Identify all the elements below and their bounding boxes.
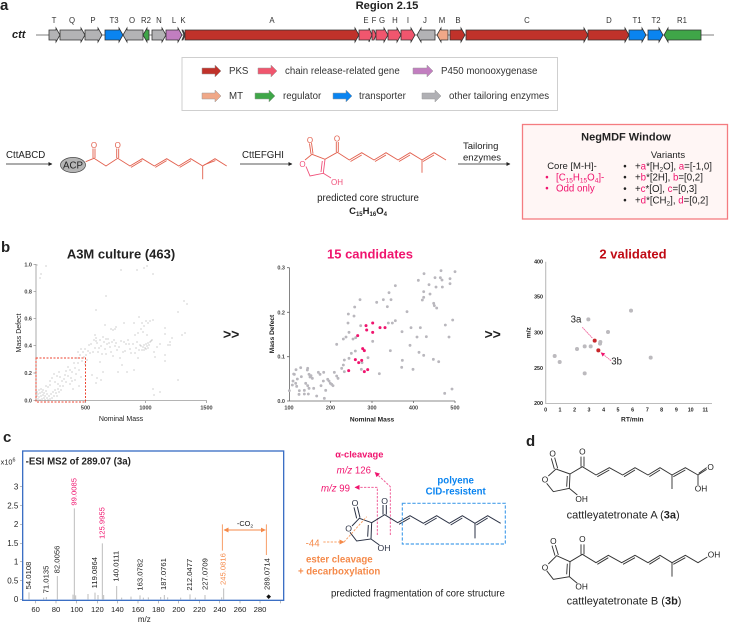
panel label d: d (526, 433, 535, 450)
CO2 loss bracket (222, 519, 266, 555)
scatter chart: 15 candidates: 400 (409, 406, 418, 412)
scatter chart: 15 candidates: 0.0 (277, 399, 285, 405)
peak labels: 212.0477 (185, 559, 194, 591)
spectrum title: -ESI MS2 of 289.07 (3a) (26, 457, 131, 468)
gene name labels: N (156, 16, 162, 25)
legend panel: chain release-related gene (285, 66, 400, 77)
caption: cattleyatetronate A: cattleyatetronate A (3a) (567, 509, 680, 521)
peak labels: 187.0761 (159, 558, 168, 590)
panel: NegMDF Window: 2 (667, 200, 671, 208)
core structure skeleton: O (345, 524, 352, 534)
peak labels: 245.0816 (219, 553, 228, 585)
fragmentation scheme (298, 449, 505, 599)
structure: cattleyatetronate A: O (542, 474, 549, 484)
scatter chart: 2 validated: 200 (534, 401, 543, 407)
y axis scale label: x10 (1, 457, 12, 466)
gene name labels: A (269, 16, 275, 25)
scatter chart: 2 validated: 11 (703, 407, 708, 413)
caption: predicted core structure: O (376, 206, 384, 217)
core structure skeleton (345, 496, 501, 553)
scatter chart: 2 validated: 5 (617, 407, 620, 413)
label: -44: -44 (306, 538, 320, 549)
panel: NegMDF Window: • (623, 162, 627, 172)
panel: NegMDF Window: Variants (651, 150, 685, 161)
legend panel: regulator (283, 91, 322, 102)
x tick labels: 140 (111, 605, 124, 614)
scatter chart: 2 validated: 10 (688, 407, 694, 413)
x tick labels: 240 (213, 605, 226, 614)
scatter chart: A3M culture: Mass Defect (16, 313, 23, 352)
precursor marker (266, 594, 271, 599)
structure: cattleyatetronate A: OH (695, 484, 707, 494)
gene name labels: C (524, 16, 530, 25)
structure: ACP-bound polyketide: O (115, 141, 121, 150)
gene name labels: K (180, 16, 186, 25)
legend panel (182, 58, 558, 110)
panel: NegMDF Window: NegMDF Window (581, 132, 671, 144)
caption: predicted core structure: 15 (356, 212, 363, 218)
y tick labels: 1 (14, 557, 19, 566)
structure: cattleyatetronate B: OH (575, 581, 588, 591)
panel: NegMDF Window: O (587, 172, 595, 184)
x tick labels (31, 605, 266, 614)
x tick labels: 100 (70, 605, 83, 614)
label: decarboxylation: + decarboxylation (298, 566, 380, 577)
x tick labels: 60 (31, 605, 40, 614)
scatter chart: A3M culture: 500 (81, 406, 90, 412)
structure: ACP-bound polyketide: O (91, 141, 97, 150)
label: polyene: polyene (437, 475, 475, 486)
gene name labels: T2 (651, 16, 661, 25)
peak labels: 119.0864 (90, 556, 99, 588)
spectrum frame (23, 451, 284, 600)
structure: predicted core: O (334, 134, 340, 144)
scatter chart: 15 candidates: 0.1 (277, 355, 285, 361)
gene name labels: Q (69, 16, 75, 25)
arrow: tailoring enzymes (458, 141, 510, 164)
gene name labels: D (606, 16, 612, 25)
orange loss arrow (323, 517, 367, 542)
panel: NegMDF Window: • (623, 196, 627, 206)
scatter chart: A3M culture: Nominal Mass (99, 416, 144, 423)
scatter chart: A3M culture: 0.6 (24, 317, 32, 323)
scatter chart: 2 validated: 250 (534, 366, 543, 372)
panel: NegMDF Window: +c*[O], c=[0,3] (635, 184, 697, 195)
panel: NegMDF Window: +b*[2H], b=[0,2] (635, 172, 703, 184)
caption: predicted core structure: predicted core structure (317, 193, 419, 204)
gene name labels: F (372, 16, 377, 25)
panel: NegMDF Window: 15 (566, 178, 573, 184)
structure: ACP-bound polyketide: ACP (63, 160, 83, 172)
panel: NegMDF Window: 15 (580, 178, 588, 184)
structure: cattleyatetronate B: OH (708, 549, 720, 559)
panel: NegMDF Window: 2 (660, 166, 664, 174)
label: m/z 99: m/z 99 (321, 484, 350, 495)
legend panel: PKS (229, 66, 249, 77)
panel: NegMDF Window: • (623, 172, 627, 184)
heading: A3M culture: A3M culture (463) (67, 246, 175, 262)
arrow: >> second: >> (484, 326, 501, 342)
arrow: CttEFGHI: CttEFGHI (242, 150, 284, 161)
scatter chart: 2 validated: 1 (559, 407, 562, 413)
CO2 loss bracket: -CO (237, 519, 250, 528)
y axis scale label: 6 (12, 458, 15, 464)
peak labels: 125.9955 (97, 507, 106, 539)
arrow: CttABCD (6, 150, 52, 164)
y tick labels: 0.5 (7, 576, 19, 585)
heading: Region 2.15: Region 2.15 (356, 0, 418, 12)
y tick labels (7, 482, 19, 604)
label: ester cleavage: ester cleavage (306, 555, 373, 566)
scatter chart: A3M culture: 1.0 (24, 262, 32, 268)
arrow: >> first: >> (223, 326, 239, 342)
y tick labels: 1.5 (7, 539, 19, 548)
CO2 loss bracket: 2 (250, 524, 253, 530)
arrow: CttABCD: CttABCD (6, 150, 45, 161)
y tick labels: 0 (14, 595, 19, 604)
scatter chart: 2 validated: 4 (602, 407, 605, 413)
arrow: tailoring enzymes: Tailoring (463, 141, 498, 152)
x tick labels: 220 (193, 605, 206, 614)
y tick labels: 3 (14, 482, 19, 491)
box: polyene region (402, 503, 505, 544)
structure: predicted core: OH (331, 178, 343, 187)
structure: cattleyatetronate A: OH (575, 494, 588, 504)
scatter chart: 15 candidates: 500 (450, 406, 460, 412)
x tick labels: 280 (254, 605, 266, 614)
scatter chart: 2 validated: 350 (534, 295, 543, 301)
caption: predicted fragmentation: predicted fragmentation of core structure (331, 588, 505, 599)
peak labels: 140.0111 (112, 551, 121, 582)
scatter chart: A3M culture: 0.2 (24, 371, 32, 377)
gene name labels: M (439, 16, 445, 25)
gene name labels: P (90, 16, 96, 25)
peak labels: 227.0709 (201, 558, 210, 590)
arrow: CttEFGHI (240, 150, 292, 164)
peak labels: 82.0056 (53, 546, 62, 573)
peak labels: 54.0108 (24, 562, 33, 589)
scatter chart: 15 candidates: Nominal Mass (350, 416, 394, 424)
scatter chart: 15 candidates: Mass Defect (269, 314, 276, 353)
structure: cattleyatetronate A: O (579, 447, 586, 457)
scatter chart: A3M culture: 0.4 (24, 344, 33, 350)
structure: cattleyatetronate B (542, 534, 720, 591)
panel: NegMDF Window: a=[-1,0] (679, 162, 712, 172)
gene name labels: E (363, 16, 369, 25)
scatter chart: 2 validated: 3a (571, 314, 582, 325)
structure: cattleyatetronate A (542, 447, 714, 504)
y tick labels: 2 (14, 520, 19, 529)
x tick labels: 200 (172, 605, 185, 614)
panel: NegMDF Window: d=[0,2] (678, 196, 708, 206)
scatter chart: 2 validated: 7 (646, 407, 649, 413)
gene cluster label ctt: ctt (12, 29, 27, 41)
scatter chart: 15 candidates: 200 (326, 406, 335, 412)
arrow: tailoring enzymes: enzymes (463, 152, 501, 164)
caption: predicted core structure: H (363, 206, 370, 217)
structure: predicted core (299, 134, 446, 187)
panel: NegMDF Window: • (545, 172, 549, 184)
scatter chart: 2 validated: 3b (611, 356, 622, 367)
scatter chart: 15 candidates (269, 266, 460, 424)
scatter chart: 2 validated: RT/min (621, 416, 644, 423)
scatter chart: 2 validated: 2 (573, 407, 576, 413)
heading: 15 candidates: 15 candidates (327, 246, 413, 262)
peak labels: 289.0714 (263, 557, 272, 590)
scatter chart: A3M culture (16, 262, 213, 423)
panel: NegMDF Window: O], (663, 162, 679, 172)
x tick labels: 120 (91, 605, 104, 614)
panel: NegMDF Window: H (573, 172, 580, 184)
gene name labels: T1 (632, 16, 642, 25)
scatter chart: 2 validated: 8 (660, 407, 663, 413)
structure: cattleyatetronate B: O (579, 534, 586, 544)
scatter chart: A3M culture: 0.8 (24, 289, 32, 295)
compounds panel (542, 447, 720, 608)
scatter chart: 15 candidates: 0.3 (277, 266, 285, 272)
peak labels: 99.0085 (70, 478, 79, 506)
scatter chart: 2 validated: 3 (588, 407, 591, 413)
caption: predicted core structure: 4 (384, 212, 388, 218)
scatter chart: A3M culture: 1000 (139, 406, 152, 412)
peak labels: 163.0782 (135, 559, 144, 591)
legend panel: P450 monooxygenase (441, 66, 537, 77)
scatter chart: 2 validated: 9 (675, 407, 678, 413)
gene name labels: R1 (677, 16, 687, 25)
x tick labels: 260 (234, 605, 246, 614)
structure: predicted core: O (299, 160, 306, 169)
core structure skeleton: O (381, 496, 388, 506)
peak labels (24, 478, 272, 593)
structure: predicted core: O (307, 136, 313, 145)
scatter chart: 2 validated: 300 (534, 330, 543, 336)
structure: cattleyatetronate A: O (549, 449, 556, 459)
scatter chart: 15 candidates: 100 (284, 406, 294, 412)
y tick labels: 2.5 (7, 501, 19, 510)
scatter chart: 2 validated: m/z (525, 326, 532, 338)
gene name labels: H (392, 16, 398, 25)
spectrum peaks (29, 508, 224, 599)
x tick labels: 160 (132, 605, 144, 614)
scatter chart: 2 validated: 0 (544, 407, 547, 413)
gene name labels: T3 (109, 16, 119, 25)
core structure skeleton: O (352, 498, 359, 508)
gene name labels: J (423, 16, 427, 25)
scatter chart: A3M culture: 1500 (200, 406, 213, 412)
scatter chart: 15 candidates: 0.2 (277, 310, 285, 316)
panel: NegMDF Window: • (545, 184, 549, 194)
scatter chart: 2 validated: 400 (534, 259, 543, 265)
panel: NegMDF Window: Odd only (556, 184, 595, 194)
gene name labels (52, 16, 687, 25)
scatter chart: 2 validated: 6 (631, 407, 634, 413)
scatter chart: 15 candidates: 300 (367, 406, 377, 412)
structure: ACP-bound polyketide (60, 141, 227, 179)
x tick labels: 180 (152, 605, 165, 614)
heading: alpha cleavage: α-cleavage (335, 449, 383, 459)
panel label c: c (3, 429, 11, 446)
gene cluster arrows (36, 28, 714, 42)
legend panel: MT (229, 91, 243, 102)
caption: cattleyatetronate B: cattleyatetronate B (3b) (567, 596, 681, 608)
gene name labels: G (379, 16, 385, 25)
dashed pink cleavage arrows (355, 472, 390, 535)
MS2 spectrum chart (1, 451, 284, 622)
structure: cattleyatetronate B: O (542, 562, 549, 572)
panel: NegMDF Window (522, 124, 728, 219)
panel: NegMDF Window: 4 (595, 178, 599, 184)
panel: NegMDF Window: +d*[CH (635, 196, 667, 206)
legend panel: other tailoring enzymes (449, 91, 549, 102)
gene name labels: I (407, 16, 409, 25)
structure: cattleyatetronate B: O (550, 536, 557, 546)
gene name labels: B (455, 16, 461, 25)
label: m/z 126: m/z 126 (337, 466, 371, 477)
panel: NegMDF Window: [C (556, 172, 566, 184)
structure: cattleyatetronate A: O (707, 462, 714, 472)
legend panel: transporter (359, 91, 407, 102)
label: CID-resistent: CID-resistent (426, 487, 486, 498)
caption: predicted core structure (317, 193, 419, 218)
scatter chart: 2 validated (525, 259, 712, 423)
x tick labels: 80 (52, 605, 60, 614)
panel: NegMDF Window: Core [M-H]- (547, 161, 597, 172)
gene name labels: L (172, 16, 177, 25)
panel: NegMDF Window: ]- (598, 172, 604, 184)
panel: NegMDF Window: • (623, 184, 627, 195)
spectrum axes (20, 451, 280, 603)
heading: 2 validated: 2 validated (599, 246, 667, 262)
gene name labels: R2 (141, 16, 151, 25)
gene name labels: O (129, 16, 135, 25)
scatter chart: A3M culture: 0.0 (24, 399, 32, 405)
panel label b: b (1, 239, 10, 256)
caption: predicted core structure: 16 (370, 212, 377, 218)
core structure skeleton: OH (378, 543, 390, 553)
caption: predicted core structure: C (349, 206, 356, 217)
panel: NegMDF Window: ], (670, 196, 678, 206)
gene name labels: T (52, 16, 57, 25)
peak labels: 71.0135 (41, 566, 50, 593)
panel: NegMDF Window: +a*[H (635, 162, 660, 172)
